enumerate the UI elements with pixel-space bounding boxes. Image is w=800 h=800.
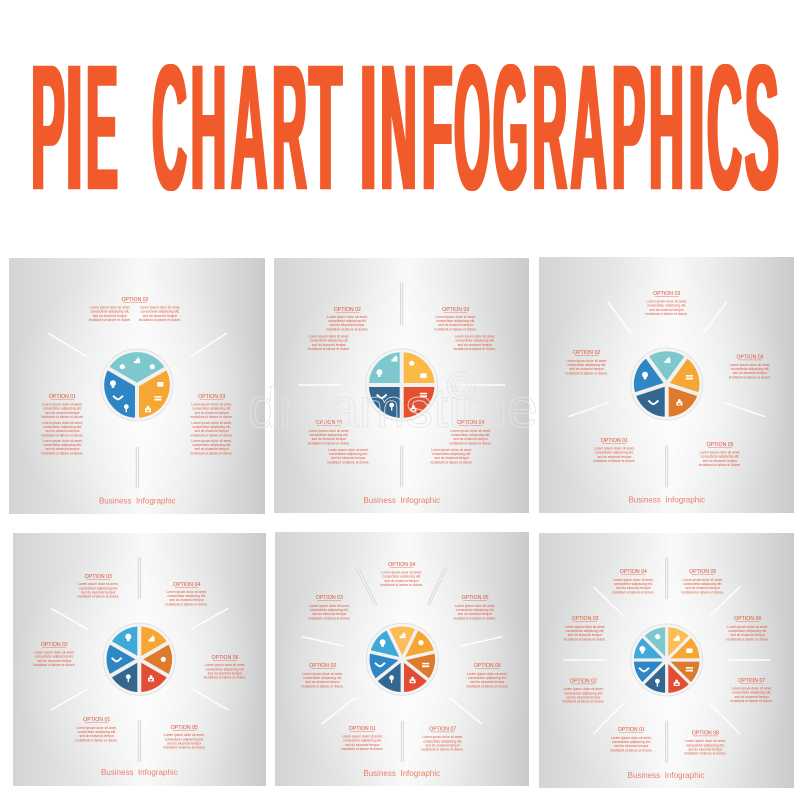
spoke lines xyxy=(568,302,765,487)
option 03: Lorem ipsum dolor sit amet, xyxy=(191,439,232,443)
option 01 xyxy=(341,726,384,751)
option 03: consectetur adipiscing elit, xyxy=(79,586,118,590)
panel: four-option pie xyxy=(274,258,529,513)
option 04: sed do eiusmod tempor xyxy=(434,456,470,460)
option 01: consectetur adipiscing elit, xyxy=(43,443,82,447)
option 01: incididunt ut labore et dolore. xyxy=(41,415,84,419)
option 03 xyxy=(646,291,688,316)
option 03: consectetur adipiscing elit, xyxy=(566,629,604,633)
option 02: incididunt ut labore et dolore. xyxy=(302,684,344,688)
option 03: Lorem ipsum dolor sit amet, xyxy=(455,334,495,338)
option 03: Lorem ipsum dolor sit amet, xyxy=(191,402,232,406)
footer label: Business Infographic xyxy=(363,768,441,778)
option 02: consectetur adipiscing elit, xyxy=(141,310,179,314)
option 02: consectetur adipiscing elit, xyxy=(310,339,348,343)
option 05: Lorem ipsum dolor sit amet, xyxy=(682,578,723,582)
option 01: incididunt ut labore et dolore. xyxy=(327,460,370,464)
option 01: consectetur adipiscing elit, xyxy=(43,407,82,411)
option 02: OPTION 02 xyxy=(573,350,600,356)
option 06: OPTION 06 xyxy=(474,663,501,669)
option 01 xyxy=(593,438,636,463)
option 01: Lorem ipsum dolor sit amet, xyxy=(328,448,369,452)
option 01: Lorem ipsum dolor sit amet, xyxy=(76,726,117,730)
option 02: consectetur adipiscing elit, xyxy=(303,676,342,680)
option 01: Lorem ipsum dolor sit amet, xyxy=(42,421,83,425)
option 04: sed do eiusmod tempor xyxy=(733,371,768,375)
option 02: OPTION 02 xyxy=(41,642,68,648)
option 02: consectetur adipiscing elit, xyxy=(567,363,606,367)
option 03: incididunt ut labore et dolore. xyxy=(308,616,351,620)
option 08: incididunt ut labore et dolore. xyxy=(684,752,727,756)
option 06 xyxy=(466,663,509,688)
option 07: OPTION 07 xyxy=(429,727,456,733)
option 02: incididunt ut labore et dolore. xyxy=(33,663,76,667)
option 06: consectetur adipiscing elit, xyxy=(206,667,244,671)
option 04 xyxy=(166,582,208,606)
option 07: Lorem ipsum dolor sit amet, xyxy=(422,735,463,739)
option 04 xyxy=(381,562,423,587)
option 04: incididunt ut labore et dolore. xyxy=(612,590,655,594)
option 04: OPTION 04 xyxy=(173,582,200,588)
title: R xyxy=(272,28,307,228)
option 05: sed do eiusmod tempor xyxy=(167,742,202,746)
option 04: Lorem ipsum dolor sit amet, xyxy=(450,429,491,433)
option 02: Lorem ipsum dolor sit amet, xyxy=(309,334,349,338)
title: A xyxy=(570,28,607,228)
option 03: OPTION 03 xyxy=(653,291,680,297)
option 01: sed do eiusmod tempor xyxy=(597,455,632,459)
panel: six-option pie xyxy=(13,533,266,786)
option 05: incididunt ut labore et dolore. xyxy=(682,590,724,594)
option 03: sed do eiusmod tempor xyxy=(194,411,230,415)
option 02: OPTION 02 xyxy=(121,297,149,303)
option 06 xyxy=(727,616,769,641)
option 01: incididunt ut labore et dolore. xyxy=(610,748,653,752)
option 04 xyxy=(612,569,655,594)
option 01: incididunt ut labore et dolore. xyxy=(593,459,636,463)
option 06: sed do eiusmod tempor xyxy=(470,680,505,684)
option 01: consectetur adipiscing elit, xyxy=(310,433,348,437)
option 03: Lorem ipsum dolor sit amet, xyxy=(565,625,605,629)
title: P xyxy=(612,28,645,228)
option 02: Lorem ipsum dolor sit amet, xyxy=(327,315,368,319)
option 01: Lorem ipsum dolor sit amet, xyxy=(309,429,349,433)
option 03: OPTION 03 xyxy=(85,574,112,580)
option 02: sed do eiusmod tempor xyxy=(330,323,365,327)
option 07: OPTION 07 xyxy=(738,678,765,684)
option 06: consectetur adipiscing elit, xyxy=(728,629,767,633)
option 08 xyxy=(684,730,727,756)
option 03 xyxy=(77,574,120,599)
watermark: dreamstime xyxy=(248,376,538,439)
option 07: incididunt ut labore et dolore. xyxy=(731,699,773,703)
option 04: consectetur adipiscing elit, xyxy=(451,433,490,437)
option 02: incididunt ut labore et dolore. xyxy=(566,371,608,375)
option 03: Lorem ipsum dolor sit amet, xyxy=(309,604,350,608)
option 04: incididunt ut labore et dolore. xyxy=(381,583,423,587)
option 07: consectetur adipiscing elit, xyxy=(732,691,771,695)
footer label: Business Infographic xyxy=(628,770,705,780)
footer label: Business Infographic xyxy=(628,494,706,504)
option 05: incididunt ut labore et dolore. xyxy=(454,616,496,620)
option 04: OPTION 04 xyxy=(736,355,764,361)
option 03 xyxy=(435,307,496,351)
option 02 xyxy=(566,350,608,375)
option 02: sed do eiusmod tempor xyxy=(312,343,347,347)
option 05 xyxy=(454,595,496,620)
option 02: Lorem ipsum dolor sit amet, xyxy=(302,672,343,676)
option 03: incididunt ut labore et dolore. xyxy=(454,347,496,351)
option 04: sed do eiusmod tempor xyxy=(169,598,205,602)
option 02: Lorem ipsum dolor sit amet, xyxy=(563,687,604,691)
option 01: sed do eiusmod tempor xyxy=(45,447,81,451)
option 05: sed do eiusmod tempor xyxy=(703,459,738,463)
option 02: Lorem ipsum dolor sit amet, xyxy=(140,305,180,309)
option 01: consectetur adipiscing elit, xyxy=(343,739,382,743)
option 03: incididunt ut labore et dolore. xyxy=(191,451,233,455)
option 06 xyxy=(204,655,246,680)
footer label: Business Infographic xyxy=(363,495,441,505)
option 03 xyxy=(308,595,351,620)
option 01: sed do eiusmod tempor xyxy=(79,734,115,738)
option 03: incididunt ut labore et dolore. xyxy=(564,637,606,641)
title: F xyxy=(422,28,453,228)
option 03: consectetur adipiscing elit, xyxy=(310,608,349,612)
option 06: sed do eiusmod tempor xyxy=(208,671,243,675)
option 01: incididunt ut labore et dolore. xyxy=(41,451,84,455)
title: A xyxy=(231,28,268,228)
title: E xyxy=(86,28,118,228)
option 01: incididunt ut labore et dolore. xyxy=(41,433,84,437)
option 06: OPTION 06 xyxy=(734,616,761,622)
option 01: consectetur adipiscing elit, xyxy=(329,452,368,456)
option 05: consectetur adipiscing elit, xyxy=(701,455,739,459)
option 02: sed do eiusmod tempor xyxy=(143,314,178,318)
option 02: sed do eiusmod tempor xyxy=(566,696,601,700)
option 02: Lorem ipsum dolor sit amet, xyxy=(566,359,607,363)
option 05: Lorem ipsum dolor sit amet, xyxy=(164,733,205,737)
option 01 xyxy=(308,420,370,464)
option 06: incididunt ut labore et dolore. xyxy=(727,637,769,641)
title: C xyxy=(152,28,187,228)
option 03: incididunt ut labore et dolore. xyxy=(646,312,688,316)
pie chart xyxy=(631,348,703,420)
option 06: Lorem ipsum dolor sit amet, xyxy=(467,672,508,676)
option 01: OPTION 01 xyxy=(618,727,645,733)
option 02 xyxy=(33,642,76,667)
option 07 xyxy=(731,678,773,703)
option 05: OPTION 05 xyxy=(706,442,734,448)
option 01: Lorem ipsum dolor sit amet, xyxy=(42,402,83,406)
option 03: OPTION 03 xyxy=(571,616,599,622)
option 02: consectetur adipiscing elit, xyxy=(35,655,74,659)
title: R xyxy=(532,28,567,228)
option 01: incididunt ut labore et dolore. xyxy=(308,441,350,445)
option 04: consectetur adipiscing elit, xyxy=(731,367,769,371)
option 01: sed do eiusmod tempor xyxy=(45,411,81,415)
option 05: consectetur adipiscing elit, xyxy=(165,737,204,741)
option 05: consectetur adipiscing elit, xyxy=(456,608,494,612)
option 03: consectetur adipiscing elit, xyxy=(436,319,475,323)
option 03: sed do eiusmod tempor xyxy=(649,308,685,312)
option 03: incididunt ut labore et dolore. xyxy=(435,327,477,331)
option 02: consectetur adipiscing elit, xyxy=(328,319,367,323)
option 04: OPTION 04 xyxy=(388,562,415,568)
option 06: incididunt ut labore et dolore. xyxy=(466,684,509,688)
option 04: Lorem ipsum dolor sit amet, xyxy=(613,578,654,582)
option 03: consectetur adipiscing elit, xyxy=(647,304,686,308)
option 05: Lorem ipsum dolor sit amet, xyxy=(455,604,495,608)
option 01: consectetur adipiscing elit, xyxy=(595,451,634,455)
option 03: Lorem ipsum dolor sit amet, xyxy=(435,315,476,319)
option 01: Lorem ipsum dolor sit amet, xyxy=(342,734,383,738)
option 05: OPTION 05 xyxy=(689,569,716,575)
option 07: consectetur adipiscing elit, xyxy=(423,739,462,743)
pie chart xyxy=(631,624,703,696)
title: H xyxy=(191,28,226,228)
option 02: OPTION 02 xyxy=(334,307,361,313)
option 04: incididunt ut labore et dolore. xyxy=(431,460,473,464)
title: I xyxy=(688,28,705,228)
pie chart xyxy=(366,623,438,695)
option 02: consectetur adipiscing elit, xyxy=(91,310,129,314)
option 03: sed do eiusmod tempor xyxy=(568,633,603,637)
option 01: incididunt ut labore et dolore. xyxy=(76,738,118,742)
option 01: incididunt ut labore et dolore. xyxy=(341,747,384,751)
footer label: Business Infographic xyxy=(101,767,178,777)
option 01: consectetur adipiscing elit, xyxy=(612,740,651,744)
panel: seven-option pie xyxy=(275,532,529,786)
option 03: sed do eiusmod tempor xyxy=(458,343,493,347)
option 03: Lorem ipsum dolor sit amet, xyxy=(78,582,119,586)
option 04 xyxy=(431,420,492,464)
title: I xyxy=(359,28,377,228)
option 03: consectetur adipiscing elit, xyxy=(192,425,231,429)
option 03: consectetur adipiscing elit, xyxy=(192,407,231,411)
option 02: incididunt ut labore et dolore. xyxy=(562,700,605,704)
option 04: incididunt ut labore et dolore. xyxy=(166,602,208,606)
option 05: incididunt ut labore et dolore. xyxy=(163,746,206,750)
pie chart xyxy=(366,349,438,421)
option 04: Lorem ipsum dolor sit amet, xyxy=(730,363,770,367)
option 04: OPTION 04 xyxy=(457,420,484,426)
option 02: Lorem ipsum dolor sit amet, xyxy=(90,305,130,309)
option 01: OPTION 01 xyxy=(83,717,110,723)
option 03 xyxy=(564,616,606,641)
option 01: Lorem ipsum dolor sit amet, xyxy=(42,439,83,443)
option 05: sed do eiusmod tempor xyxy=(685,586,721,590)
option 01: sed do eiusmod tempor xyxy=(45,429,81,433)
option 03: OPTION 03 xyxy=(316,595,343,601)
option 04: sed do eiusmod tempor xyxy=(384,579,420,583)
option 06: consectetur adipiscing elit, xyxy=(468,676,507,680)
option 02: consectetur adipiscing elit, xyxy=(564,691,603,695)
option 03 xyxy=(191,394,233,455)
option 05: sed do eiusmod tempor xyxy=(458,612,493,616)
option 01: sed do eiusmod tempor xyxy=(614,744,649,748)
option 01: sed do eiusmod tempor xyxy=(312,437,347,441)
option 01: sed do eiusmod tempor xyxy=(345,743,380,747)
option 05: Lorem ipsum dolor sit amet, xyxy=(700,450,740,454)
spoke lines xyxy=(48,333,227,488)
option 07: Lorem ipsum dolor sit amet, xyxy=(731,686,772,690)
option 04: sed do eiusmod tempor xyxy=(453,437,489,441)
option 02: sed do eiusmod tempor xyxy=(569,367,605,371)
pie chart xyxy=(103,623,175,695)
title: I xyxy=(65,28,83,228)
footer label: Business Infographic xyxy=(99,496,176,506)
option 01: OPTION 01 xyxy=(49,394,76,400)
option 01: OPTION 01 xyxy=(601,438,628,444)
option 05 xyxy=(699,442,741,467)
option 01: sed do eiusmod tempor xyxy=(331,456,366,460)
option 06: incididunt ut labore et dolore. xyxy=(204,676,246,680)
panel: three-option pie xyxy=(9,258,265,514)
option 02 xyxy=(308,307,369,351)
option 08: OPTION 08 xyxy=(692,731,719,737)
option 02: incididunt ut labore et dolore. xyxy=(89,318,131,322)
option 03: sed do eiusmod tempor xyxy=(312,612,347,616)
option 03: Lorem ipsum dolor sit amet, xyxy=(191,421,232,425)
option 04: consectetur adipiscing elit, xyxy=(167,594,206,598)
option 02 xyxy=(302,663,344,688)
option 08: Lorem ipsum dolor sit amet, xyxy=(685,739,726,743)
option 05: OPTION 05 xyxy=(171,725,198,731)
option 02: sed do eiusmod tempor xyxy=(37,659,72,663)
option 02: sed do eiusmod tempor xyxy=(93,314,128,318)
option 04: OPTION 04 xyxy=(620,569,647,575)
option 02: OPTION 02 xyxy=(570,679,597,685)
option 03: consectetur adipiscing elit, xyxy=(456,339,494,343)
option 04: consectetur adipiscing elit, xyxy=(382,575,421,579)
option 03: incididunt ut labore et dolore. xyxy=(77,595,120,599)
option 03: OPTION 03 xyxy=(442,307,469,313)
option 07: sed do eiusmod tempor xyxy=(425,744,461,748)
option 06: OPTION 06 xyxy=(211,655,239,661)
option 01 xyxy=(76,717,118,742)
option 04: sed do eiusmod tempor xyxy=(616,586,651,590)
option 07: incididunt ut labore et dolore. xyxy=(422,748,464,752)
panel: five-option pie xyxy=(539,257,794,513)
option 04: consectetur adipiscing elit, xyxy=(614,582,653,586)
option 08: consectetur adipiscing elit, xyxy=(686,743,725,747)
option 03: sed do eiusmod tempor xyxy=(194,447,230,451)
option 03: sed do eiusmod tempor xyxy=(438,323,474,327)
option 05 xyxy=(682,569,724,594)
spoke lines xyxy=(563,557,770,763)
option 02: OPTION 02 xyxy=(309,663,336,669)
option 03: consectetur adipiscing elit, xyxy=(192,443,231,447)
spoke lines xyxy=(51,557,228,762)
option 02: incididunt ut labore et dolore. xyxy=(326,327,369,331)
option 05: incididunt ut labore et dolore. xyxy=(699,463,741,467)
title: H xyxy=(649,28,684,228)
option 03: Lorem ipsum dolor sit amet, xyxy=(646,299,687,303)
option 03: incididunt ut labore et dolore. xyxy=(191,433,233,437)
pie chart xyxy=(101,349,173,421)
option 01 xyxy=(610,727,653,752)
option 04: Lorem ipsum dolor sit amet, xyxy=(431,448,472,452)
option 06: Lorem ipsum dolor sit amet, xyxy=(205,663,245,667)
option 07 xyxy=(422,726,464,752)
option 04: Lorem ipsum dolor sit amet, xyxy=(381,570,422,574)
title: O xyxy=(454,28,490,228)
option 04: consectetur adipiscing elit, xyxy=(432,452,471,456)
option 07: sed do eiusmod tempor xyxy=(734,695,770,699)
option 01: OPTION 01 xyxy=(349,726,376,732)
title: G xyxy=(493,28,528,228)
option 01: consectetur adipiscing elit, xyxy=(43,425,82,429)
option 04: incididunt ut labore et dolore. xyxy=(729,375,771,379)
option 03: incididunt ut labore et dolore. xyxy=(191,415,233,419)
option 02: incididunt ut labore et dolore. xyxy=(139,318,181,322)
option 03: sed do eiusmod tempor xyxy=(81,590,116,594)
panel: eight-option pie xyxy=(539,533,794,788)
title: T xyxy=(309,28,342,228)
spoke lines xyxy=(298,283,505,487)
title: P xyxy=(31,28,65,228)
option 01: Lorem ipsum dolor sit amet, xyxy=(594,446,635,450)
option 01: OPTION 01 xyxy=(315,420,343,426)
option 02: sed do eiusmod tempor xyxy=(305,680,341,684)
option 05: OPTION 05 xyxy=(461,595,489,601)
option 04: Lorem ipsum dolor sit amet, xyxy=(166,590,207,594)
option 05: consectetur adipiscing elit, xyxy=(683,582,722,586)
option 04 xyxy=(729,354,771,379)
option 01: Lorem ipsum dolor sit amet, xyxy=(611,736,652,740)
option 06: Lorem ipsum dolor sit amet, xyxy=(727,625,768,629)
option 03: OPTION 03 xyxy=(198,394,225,400)
option 02: Lorem ipsum dolor sit amet, xyxy=(34,650,75,654)
option 08: sed do eiusmod tempor xyxy=(688,748,723,752)
option 02 xyxy=(562,678,605,704)
spoke lines xyxy=(302,568,502,762)
option 02 xyxy=(89,297,181,322)
option 01: consectetur adipiscing elit, xyxy=(77,730,116,734)
option 06: sed do eiusmod tempor xyxy=(730,633,766,637)
option 03: sed do eiusmod tempor xyxy=(194,429,230,433)
option 02: incididunt ut labore et dolore. xyxy=(308,347,350,351)
option 01 xyxy=(41,394,84,455)
option 05 xyxy=(163,725,206,750)
option 04: incididunt ut labore et dolore. xyxy=(450,441,492,445)
title: N xyxy=(380,28,417,228)
